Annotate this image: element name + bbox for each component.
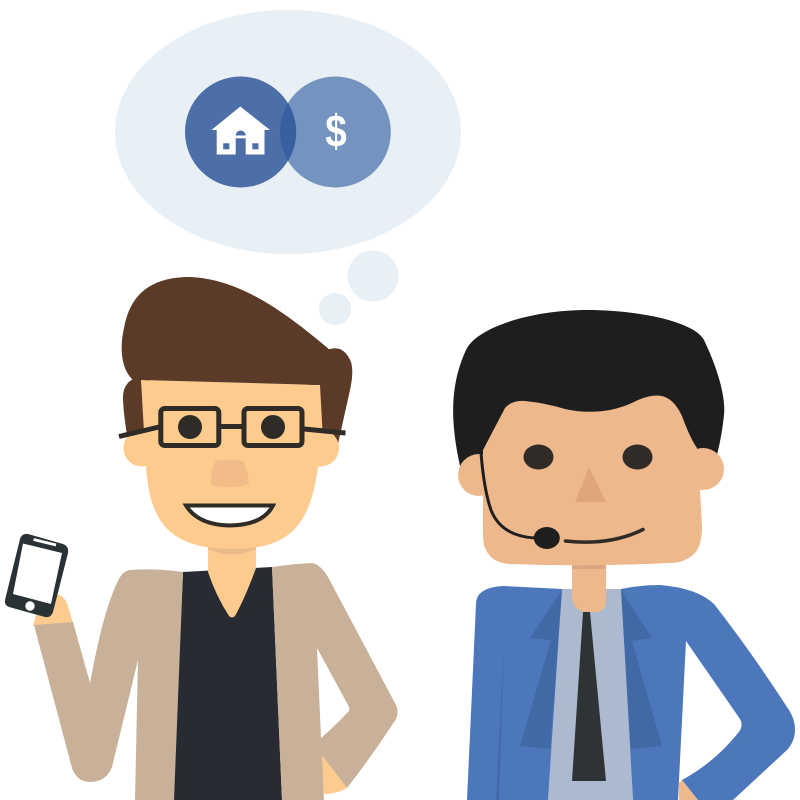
neck — [208, 540, 256, 618]
hand on hip — [320, 752, 348, 794]
eyes — [524, 444, 554, 470]
suit left side — [467, 586, 562, 800]
icon: dollar in circle — [280, 76, 391, 188]
left lapel — [520, 590, 562, 749]
jacket right side and bent arm — [272, 563, 398, 800]
suit right side and arm — [621, 585, 795, 800]
mouth — [566, 530, 643, 542]
ears — [124, 430, 160, 466]
right lapel — [621, 590, 662, 749]
smile — [186, 506, 273, 526]
icon: dollar in circle: $ — [325, 106, 347, 156]
shirt — [548, 589, 633, 800]
hand holding phone — [33, 594, 73, 626]
jacket left side and raised arm — [34, 569, 183, 800]
suit crease — [496, 643, 504, 800]
hand on hip — [679, 780, 698, 800]
ears — [458, 454, 500, 496]
hair — [453, 310, 724, 470]
headset — [481, 453, 560, 549]
shirt — [173, 567, 282, 800]
glasses — [119, 408, 346, 446]
character: customer with phone — [5, 277, 397, 800]
icon: house in circle — [185, 76, 296, 188]
face — [141, 380, 323, 549]
tie — [572, 612, 606, 781]
nose — [211, 460, 249, 487]
character: agent with headset — [453, 310, 795, 800]
eyes — [178, 415, 202, 439]
hair — [122, 277, 330, 385]
nose — [575, 467, 606, 502]
thought bubble — [115, 10, 461, 325]
icon: smartphone — [5, 534, 68, 617]
face — [483, 396, 702, 565]
neck — [572, 550, 606, 612]
back hair — [123, 379, 150, 440]
